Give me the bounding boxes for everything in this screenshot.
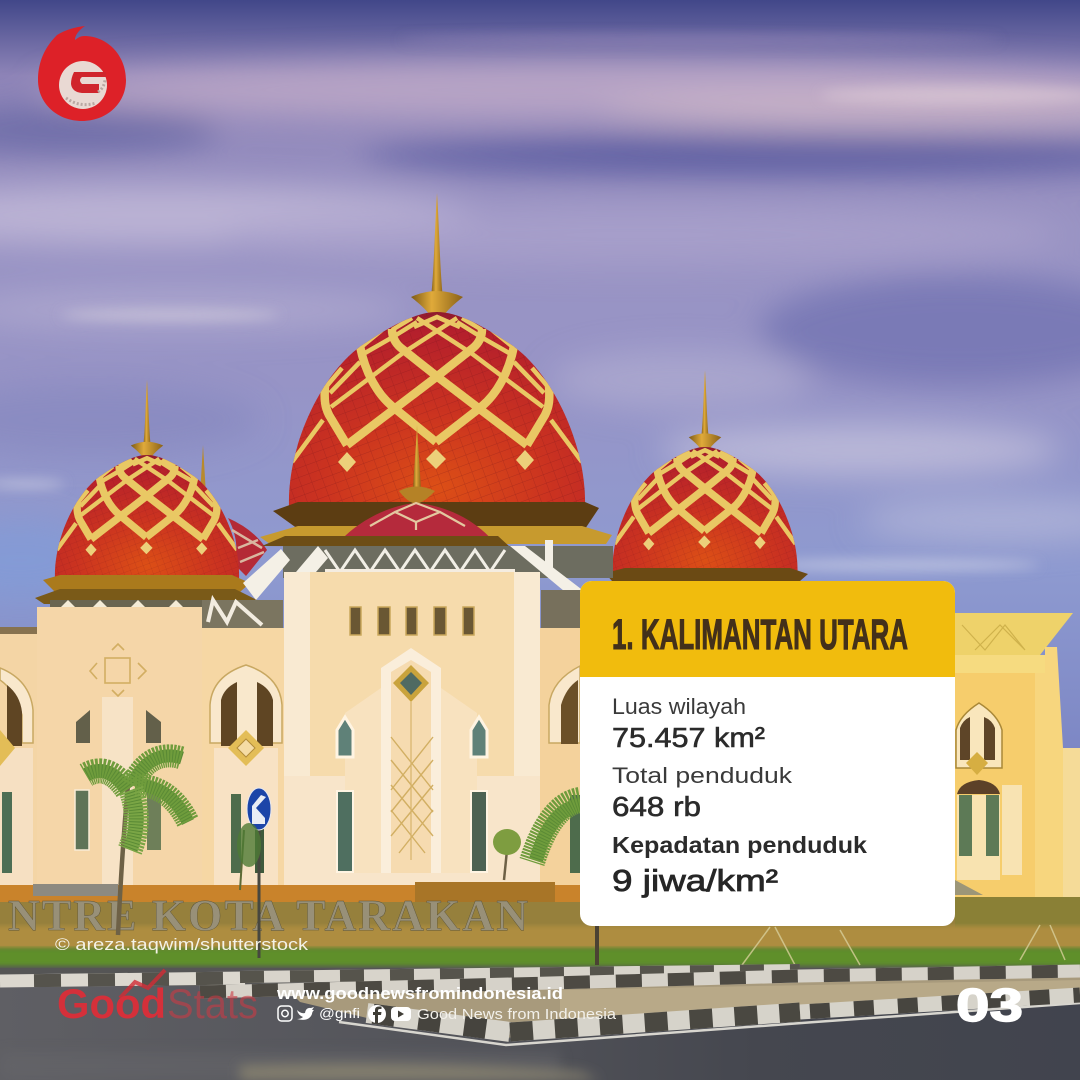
road and traffic island xyxy=(0,972,1080,1080)
building: right wing beyond card xyxy=(955,613,1080,898)
dome: right xyxy=(611,370,799,573)
website address: www.goodnewsfromindonesia.id xyxy=(276,984,563,1003)
value: density: 9 jiwa/km² xyxy=(612,863,778,898)
dome bases and roof bands xyxy=(35,502,808,604)
label: population: Total penduduk xyxy=(612,763,793,788)
ground: wall base, planting bed and grass xyxy=(0,882,1080,966)
GoodStats logo: Good xyxy=(57,980,166,1027)
small front dome xyxy=(262,425,510,547)
handle: @gnfi xyxy=(319,1005,360,1021)
monument sign lettering: NTRE KOTA TARAKAN xyxy=(8,891,528,940)
dome: main xyxy=(287,193,587,507)
palm tree: left xyxy=(86,756,188,935)
label: area: Luas wilayah xyxy=(612,694,746,719)
building: central portal with diamond and lattice xyxy=(345,648,477,873)
building: tower arched and tall windows xyxy=(337,717,487,872)
GoodStats logo: Stats xyxy=(167,980,258,1027)
truss band under domes xyxy=(50,540,613,630)
label: density: Kepadatan penduduk xyxy=(612,832,867,858)
value: population: 648 rb xyxy=(612,791,701,822)
back dome behind left dome xyxy=(200,445,267,576)
icon: instagram xyxy=(278,1006,292,1021)
GoodStats logo xyxy=(57,970,258,1027)
road sign: blue arrow xyxy=(247,788,271,958)
value: area: 75.457 km² xyxy=(612,722,765,753)
social media row xyxy=(278,1005,617,1023)
dome: left xyxy=(54,380,240,578)
young trees and right palm xyxy=(237,800,597,965)
page number: 03 xyxy=(956,979,1023,1031)
data card xyxy=(580,581,955,926)
logo: GNFI red flame circle xyxy=(38,26,126,121)
channel name: Good News from Indonesia xyxy=(417,1006,617,1023)
card header xyxy=(580,581,955,677)
curbs: black and white blocks xyxy=(0,970,1080,1032)
icon: youtube xyxy=(391,1007,411,1021)
building: left wing and tower walls xyxy=(0,572,585,893)
building: upper tower windows xyxy=(350,607,474,635)
icon: twitter xyxy=(297,1007,314,1020)
icon: facebook xyxy=(368,1005,386,1023)
photo credit: © areza.taqwim/shutterstock xyxy=(55,935,309,954)
building: left wing windows, arches and ornaments xyxy=(0,644,580,873)
card body xyxy=(580,581,955,926)
sky with clouds xyxy=(0,0,1080,760)
